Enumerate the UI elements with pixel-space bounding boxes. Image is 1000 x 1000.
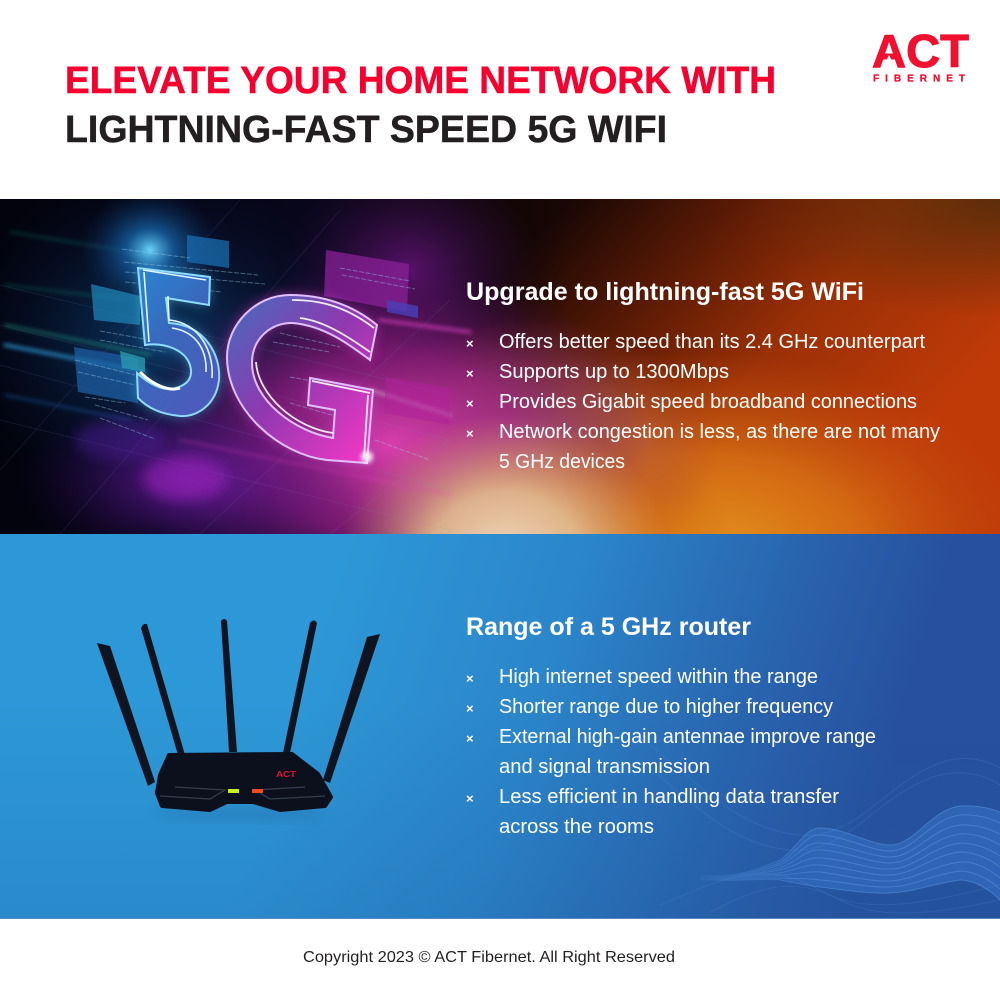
logo: ACT Fibernet: FIBERNET — [873, 74, 965, 84]
floating panels — [74, 235, 450, 425]
bullet list: router range: across the rooms — [499, 816, 654, 838]
bullet list: router range: High internet speed within the range — [499, 666, 818, 688]
panel background — [0, 534, 1000, 919]
bullet list: 5G benefits — [466, 331, 940, 473]
bullet list: router range: Shorter range due to higher frequency — [499, 696, 833, 718]
bullet list: 5G benefits: × — [466, 366, 474, 381]
bullet list: 5G benefits: Offers better speed than its 2.4 GHz counterpart — [499, 331, 925, 353]
bullet list: 5G benefits: Network congestion is less, as there are not many — [499, 421, 940, 443]
glows — [88, 199, 210, 296]
bullet list: 5G benefits: × — [466, 396, 474, 411]
bullet list: 5G benefits: Supports up to 1300Mbps — [499, 361, 729, 383]
panel: range of a 5 GHz router — [0, 534, 1000, 919]
light streaks — [5, 232, 470, 495]
bullet list: router range: × — [466, 701, 474, 716]
panel: upgrade to 5G WiFi — [0, 199, 1000, 534]
perspective grid — [0, 200, 450, 534]
bullet list: router range: × — [466, 791, 474, 806]
copyright footer: Copyright 2023 © ACT Fibernet. All Right Reserved — [303, 949, 675, 966]
bullet list: 5G benefits: × — [466, 336, 474, 351]
bullet list: router range: × — [466, 731, 474, 746]
letter G — [227, 295, 377, 463]
illustration: 5G hologram — [0, 188, 470, 534]
bullet list: 5G benefits: × — [466, 426, 474, 441]
router logo: ACT — [276, 770, 296, 779]
heading: range: Range of a 5 GHz router — [466, 613, 751, 641]
bullet list: router range — [466, 666, 876, 838]
code lines — [75, 249, 430, 460]
logo: ACT Fibernet: ACT — [872, 25, 969, 77]
bullet list: 5G benefits: Provides Gigabit speed broadband connections — [499, 391, 917, 413]
bullet list: 5G benefits: 5 GHz devices — [499, 451, 625, 473]
router front trim — [160, 787, 325, 799]
router body — [157, 754, 331, 810]
title: ELEVATE YOUR HOME NETWORK WITH — [65, 60, 776, 102]
illustration: router — [97, 619, 380, 820]
panel background — [0, 199, 1000, 534]
status lights — [228, 789, 263, 793]
bullet list: router range: × — [466, 671, 474, 686]
router shadow — [155, 808, 325, 820]
wave pattern — [640, 745, 1000, 913]
title: LIGHTNING-FAST SPEED 5G WIFI — [65, 109, 667, 151]
bullet list: router range: Less efficient in handling data transfer — [499, 786, 839, 808]
antennas — [97, 619, 380, 786]
title — [65, 60, 776, 151]
bullet list: router range: External high-gain antennae improve range — [499, 726, 876, 748]
bullet list: router range: and signal transmission — [499, 756, 710, 778]
sparkle — [361, 451, 373, 463]
heading: upgrade: Upgrade to lightning-fast 5G WiFi — [466, 278, 864, 306]
digit 5 — [137, 268, 219, 416]
